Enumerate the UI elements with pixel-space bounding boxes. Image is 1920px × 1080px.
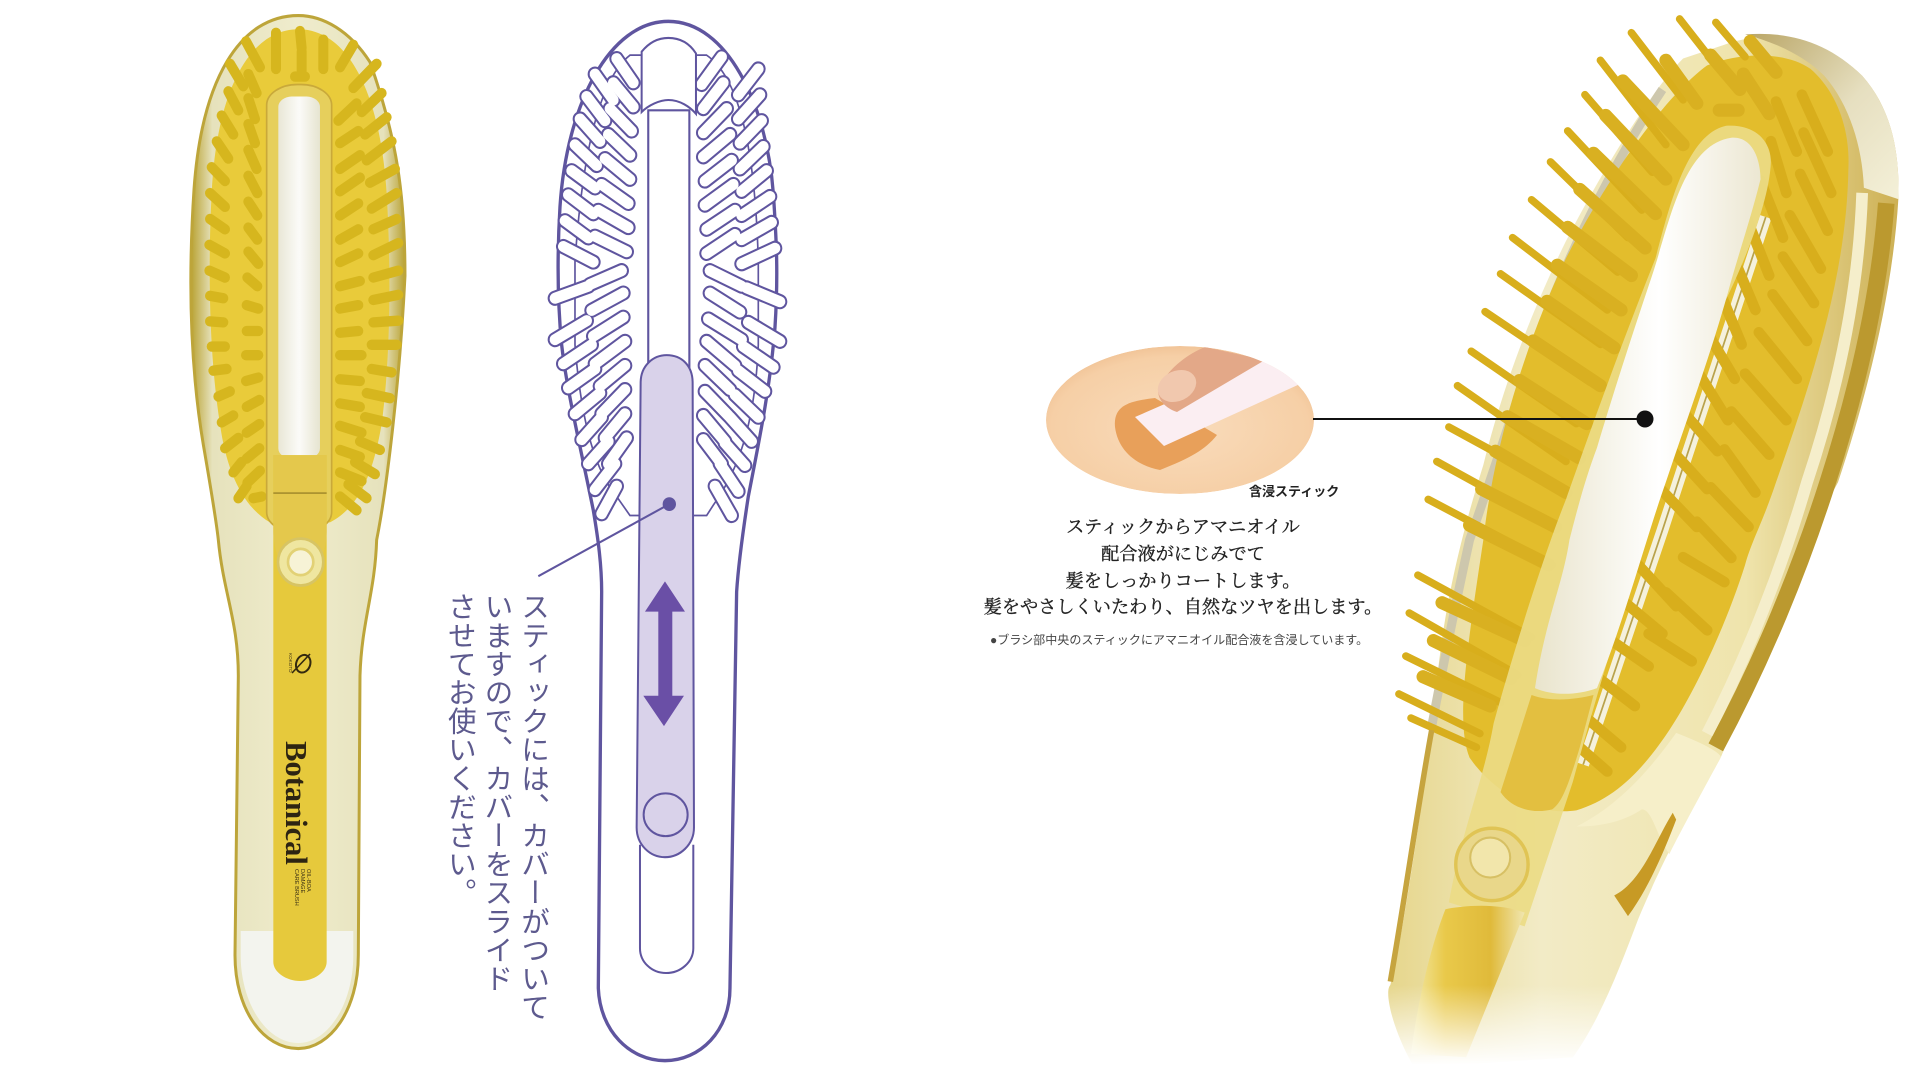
product name small text bbox=[293, 869, 311, 906]
product name small text: CARE BRUSH bbox=[293, 869, 299, 906]
body bbox=[1388, 38, 1899, 1068]
pin pad bbox=[1463, 55, 1849, 811]
left inner pins bbox=[1423, 41, 1776, 706]
product photo: brush front view bbox=[191, 16, 405, 1049]
sliding cover bbox=[637, 355, 694, 857]
stick tube bbox=[1449, 126, 1771, 926]
pins bbox=[209, 31, 398, 510]
left gold edge bbox=[1390, 730, 1432, 982]
clear stripes beside stick bbox=[1583, 217, 1766, 765]
pad outline bbox=[575, 55, 758, 515]
description text: 髪をしっかりコートします。 bbox=[1066, 571, 1300, 591]
lower slot bbox=[640, 845, 693, 973]
slider cover bbox=[273, 455, 327, 981]
brush outline bbox=[558, 21, 777, 1061]
brand logo bbox=[288, 653, 313, 675]
product name small text: DAMAGE bbox=[299, 869, 305, 894]
callout dot bbox=[1636, 410, 1654, 428]
brush body bbox=[191, 16, 405, 1049]
oil stain bbox=[1115, 398, 1217, 470]
clear dome bbox=[1745, 34, 1899, 199]
clear tip of handle bbox=[241, 931, 353, 1043]
cream junction bbox=[1576, 733, 1721, 854]
description text bbox=[984, 517, 1382, 617]
product photo: angled close-up brush bbox=[1388, 19, 1899, 1068]
bristle capsules bbox=[555, 57, 780, 515]
amber spot bbox=[1614, 813, 1676, 916]
vertical caption: させてお使いください。 bbox=[444, 592, 476, 907]
slider knob bbox=[278, 539, 323, 585]
vertical caption: いますので、カバーをスライド bbox=[480, 592, 512, 992]
finger bbox=[1158, 347, 1265, 412]
white oil stick bbox=[278, 97, 320, 459]
oil stick tube bbox=[267, 84, 332, 533]
leader line and dot bbox=[538, 497, 676, 576]
brand text: Botanical: Botanical bbox=[279, 741, 313, 865]
description text: スティックからアマニオイル bbox=[1066, 517, 1300, 537]
skin oval bbox=[1046, 346, 1314, 494]
description text: 配合液がにじみでて bbox=[1101, 544, 1265, 564]
oil stick inset photo bbox=[1046, 346, 1314, 494]
footnote: ●ブラシ部中央のスティックにアマニオイル配合液を含浸しています。 bbox=[990, 633, 1368, 647]
stick tube bbox=[648, 110, 689, 379]
line diagram: brush with sliding cover bbox=[538, 21, 780, 1061]
right pins bbox=[1580, 95, 1831, 771]
double arrow bbox=[643, 581, 685, 726]
slider cover bbox=[1501, 695, 1594, 811]
description text: 髪をやさしくいたわり、自然なツヤを出します。 bbox=[984, 597, 1382, 617]
rear rim strip bbox=[1432, 90, 1662, 727]
slider knob bbox=[1456, 828, 1528, 901]
left long pins bbox=[1399, 19, 1745, 747]
vertical caption bbox=[444, 592, 549, 1021]
white stick bbox=[1535, 138, 1761, 694]
gold side band bbox=[1716, 203, 1886, 747]
bottom fade bbox=[1360, 985, 1780, 1065]
brand logo: KOKOTO bbox=[288, 653, 293, 673]
product name small text: OIL-BOA bbox=[305, 869, 311, 892]
label: stick name: 含浸スティック bbox=[1249, 484, 1339, 499]
yellow pin pad bbox=[210, 29, 389, 522]
white stick bbox=[1135, 358, 1300, 446]
cover knob bbox=[644, 793, 688, 836]
leader line bbox=[1313, 418, 1645, 420]
stick head bbox=[642, 38, 696, 114]
vertical caption: スティックには、カバーがついて bbox=[517, 592, 549, 1021]
